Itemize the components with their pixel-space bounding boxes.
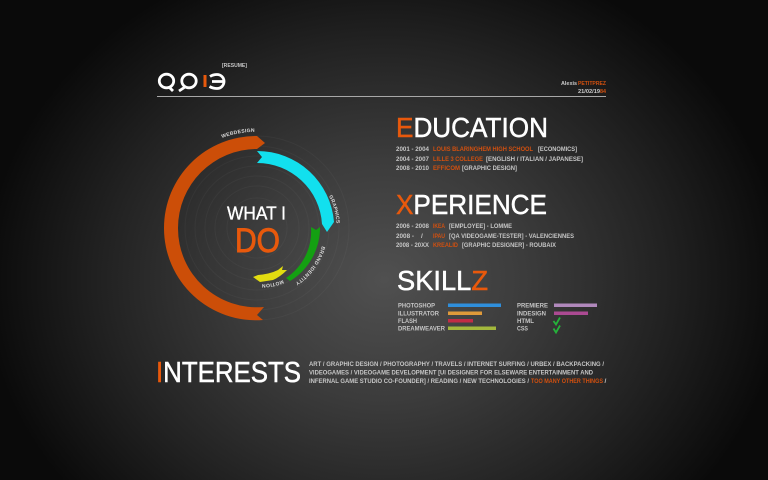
segment: graphics [257, 151, 334, 232]
interests text: VIDEOGAMES / VIDEOGAME DEVELOPMENT [UI DESIGNER FOR ELSEWARE ENTERTAINMENT AND [309, 370, 593, 376]
experience entries: 2008 - [396, 233, 414, 240]
education entries: LOUIS BLARINGHEM HIGH SCHOOL [433, 146, 533, 153]
skill labels: DREAMWEAVER [398, 326, 445, 332]
skill labels: INDESIGN [517, 310, 546, 318]
experience entries: KREALID [433, 242, 458, 249]
segment: webdesign [164, 136, 265, 320]
education entries: LILLE 3 COLLEGE [433, 156, 484, 163]
heading: interests: INTERESTS [156, 357, 301, 389]
skill labels: ILLUSTRATOR [398, 310, 439, 318]
section: education [396, 112, 583, 172]
education entries: 2001 - 2004 [396, 146, 429, 153]
resume tag: [RESUME] [222, 63, 247, 69]
skill labels [398, 302, 549, 332]
name and birth date [561, 81, 607, 95]
skill labels: PREMIERE [517, 302, 549, 310]
experience entries: IKEA [433, 223, 445, 230]
skill labels: CSS [517, 326, 528, 332]
name and birth date: 21/02/19 [578, 89, 601, 95]
skill bars [448, 304, 597, 330]
skill labels: FLASH [398, 318, 417, 325]
interests text: INFERNAL GAME STUDIO CO-FOUNDER] / READING / NEW TECHNOLOGIES / [309, 378, 529, 385]
skill labels: HTML [517, 318, 534, 325]
experience entries [396, 223, 575, 249]
segment: brand identity [286, 227, 320, 281]
experience entries: [GRAPHIC DESIGNER] - ROUBAIX [462, 242, 557, 249]
interests text: TOO MANY OTHER THINGS [531, 378, 603, 385]
section: interests [156, 357, 606, 389]
check marks [554, 318, 560, 332]
interests text: / [604, 378, 606, 385]
circular chart: what I do [164, 128, 340, 320]
section: experience [396, 189, 575, 249]
logo [159, 74, 224, 91]
education entries: [ENGLISH / ITALIAN / JAPANESE] [486, 156, 583, 163]
experience entries: [QA VIDEOGAME-TESTER] - VALENCIENNES [449, 233, 575, 240]
experience entries: / [421, 233, 423, 240]
header [157, 63, 607, 97]
segment: motion [253, 266, 287, 282]
name and birth date: 84 [600, 89, 607, 95]
education entries: 2004 - 2007 [396, 156, 429, 163]
skill labels: PHOTOSHOP [398, 302, 436, 310]
education entries: 2008 - 2010 [396, 165, 429, 172]
interests text [309, 361, 606, 385]
center text: WHAT I [227, 202, 286, 224]
section: skills [397, 265, 597, 332]
label: motion: MOTION [262, 280, 284, 288]
label: brand identity: BRAND IDENTITY [296, 246, 326, 286]
experience entries: 2006 - 2008 [396, 223, 429, 230]
heading: experience: XPERIENCE [396, 189, 547, 220]
education entries: EFFICOM [433, 165, 460, 172]
experience entries: IPAU [433, 233, 445, 240]
education entries: [GRAPHIC DESIGN] [462, 165, 517, 172]
heading: skillz: SKILLZ [397, 265, 488, 296]
name and birth date: Alexis [561, 81, 577, 87]
heading: education: EDUCATION [396, 112, 548, 143]
experience entries: 2008 - 20XX [396, 242, 430, 249]
experience entries: [EMPLOYEE] - LOMME [449, 223, 513, 230]
center text: DO [235, 222, 280, 260]
center text [227, 202, 286, 260]
education entries [396, 146, 583, 172]
name and birth date: PETITPREZ [578, 81, 606, 87]
label: graphics: GRAPHICS [330, 195, 340, 224]
label: webdesign: WEBDESIGN [220, 128, 254, 138]
interests text: ART / GRAPHIC DESIGN / PHOTOGRAPHY / TRAVELS / INTERNET SURFING / URBEX / BACKPACKING / [309, 361, 604, 368]
education entries: [ECONOMICS] [538, 146, 577, 153]
